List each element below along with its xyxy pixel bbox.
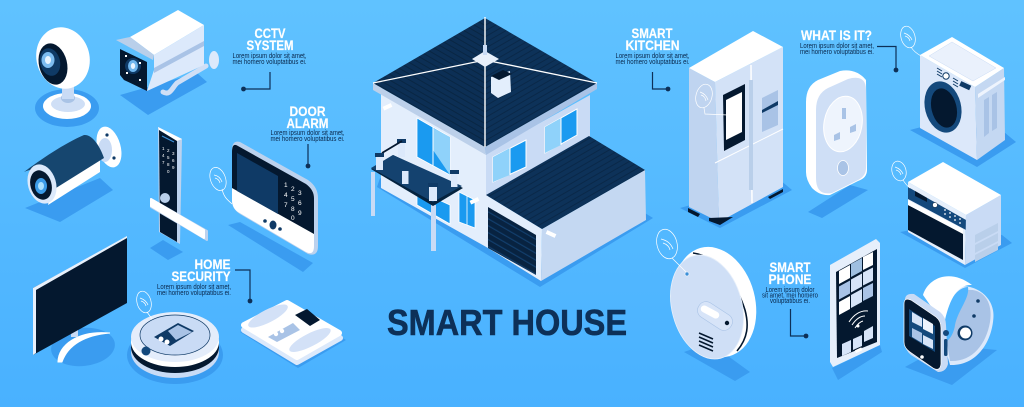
label: smart phone: [762, 260, 818, 305]
label: smart kitchen: SMART: [632, 26, 673, 41]
icon: door lock: 2: [167, 148, 170, 153]
garage: [486, 195, 542, 281]
label: smart kitchen: [616, 26, 690, 66]
icon: door alarm panel: [207, 142, 318, 272]
icon: door alarm panel: 3: [298, 190, 302, 197]
label: home security: HOME: [194, 257, 230, 272]
label: home security: [157, 257, 231, 297]
label: cctv system: CCTV: [254, 26, 286, 41]
label: door alarm: mei homero voluptatibus ei.: [270, 136, 345, 143]
house cameras: [383, 103, 556, 238]
leader: smart kitchen: [652, 72, 670, 91]
label: smart kitchen: KITCHEN: [626, 38, 680, 53]
icon: door lock: 6: [172, 158, 175, 163]
icon: door lock: 3: [172, 151, 175, 156]
icon: door lock: 7: [162, 160, 165, 165]
icon: television: [33, 236, 127, 369]
icon: robot vacuum: [127, 290, 223, 384]
title: SMART HOUSE: [387, 302, 627, 343]
icon: door lock: 0: [167, 169, 170, 174]
icon: smoke detector: [653, 227, 768, 381]
icon: door alarm panel: 4: [284, 192, 288, 199]
label: door alarm: [270, 104, 345, 143]
icon: oven: [890, 160, 1012, 268]
label: home security: Lorem ipsum dolor sit amet,: [157, 284, 231, 291]
icon: door lock: 5: [167, 155, 170, 160]
label: door alarm: ALARM: [286, 116, 328, 131]
icon: wifi bubble washer: [898, 25, 921, 56]
label: smart phone: SMART: [770, 260, 811, 275]
icon: wifi bubble oven: [890, 160, 910, 188]
icon: door alarm panel: 1: [284, 182, 288, 189]
icon: smartphone: [830, 239, 882, 380]
chimney: [491, 71, 511, 98]
icon: wifi bubble detector: [653, 227, 686, 272]
label: cctv system: [232, 26, 307, 66]
icon: smart watch: [904, 276, 997, 385]
label: smart kitchen: Lorem ipsum dolor sit amet,: [616, 53, 690, 60]
label: what is it: mei homero voluptatibus ei.: [800, 49, 874, 56]
icon: smart socket: [806, 70, 868, 218]
icon: door alarm panel: 8: [291, 206, 295, 213]
label: what is it: WHAT IS IT?: [801, 28, 872, 43]
icon: door alarm panel: 0: [291, 215, 295, 222]
label: smart phone: Lorem ipsum dolor: [766, 287, 815, 294]
label: cctv system: SYSTEM: [246, 38, 294, 53]
icon: bullet camera: [23, 124, 126, 222]
leader: door alarm: [306, 144, 310, 168]
icon: house: [371, 17, 653, 287]
label: smart phone: voluptatibus ei.: [770, 298, 810, 305]
icon: door alarm panel: 7: [284, 202, 288, 209]
leader: smart phone: [790, 309, 808, 338]
icon: washing machine: [898, 25, 1016, 167]
icon: wifi bubble vacuum: [134, 290, 154, 319]
roof eaves: [373, 83, 486, 155]
icon: door lock: 8: [167, 162, 170, 167]
icon: cctv camera: [116, 10, 219, 115]
icon: door lock: [150, 127, 207, 260]
label: smart kitchen: mei homero voluptatibus ei.: [616, 59, 690, 66]
house shadow: [377, 178, 653, 287]
label: home security: SECURITY: [172, 269, 230, 284]
label: cctv system: Lorem ipsum dolor sit amet,: [232, 53, 307, 60]
label: what is it: Lorem ipsum dolor sit amet,: [800, 43, 874, 50]
leader: what is it: [877, 46, 898, 72]
leader: cctv system: [241, 72, 270, 91]
label: smart phone: sit amet, mei homero: [762, 292, 818, 300]
icon: smart fridge: [680, 31, 792, 228]
label: door alarm: DOOR: [290, 104, 326, 119]
icon: door alarm panel: 9: [298, 210, 302, 217]
windows: [417, 118, 450, 175]
leader: home security: [235, 270, 252, 303]
label: what is it: [800, 28, 874, 56]
icon: door lock: 4: [162, 153, 165, 158]
icon: wifi bubble fridge: [693, 82, 728, 115]
label: door alarm: Lorem ipsum dolor sit amet,: [270, 130, 345, 137]
house walls: [381, 93, 488, 248]
icon: wifi bubble door alarm: [207, 165, 232, 204]
icon: bathroom scale: [240, 300, 346, 368]
icon: door alarm panel: 2: [291, 186, 295, 193]
roof: [373, 18, 485, 147]
icon: webcam: [29, 21, 99, 127]
icon: door alarm panel: 5: [291, 196, 295, 203]
icon: door lock: 9: [172, 165, 175, 170]
icon: door lock: 1: [162, 146, 165, 151]
label: home security: mei homero voluptatibus ei.: [157, 290, 231, 297]
label: cctv system: mei homero voluptatibus ei.: [232, 59, 307, 66]
label: smart phone: PHONE: [768, 272, 812, 287]
icon: door alarm panel: 6: [298, 200, 302, 207]
balcony: [371, 139, 463, 251]
